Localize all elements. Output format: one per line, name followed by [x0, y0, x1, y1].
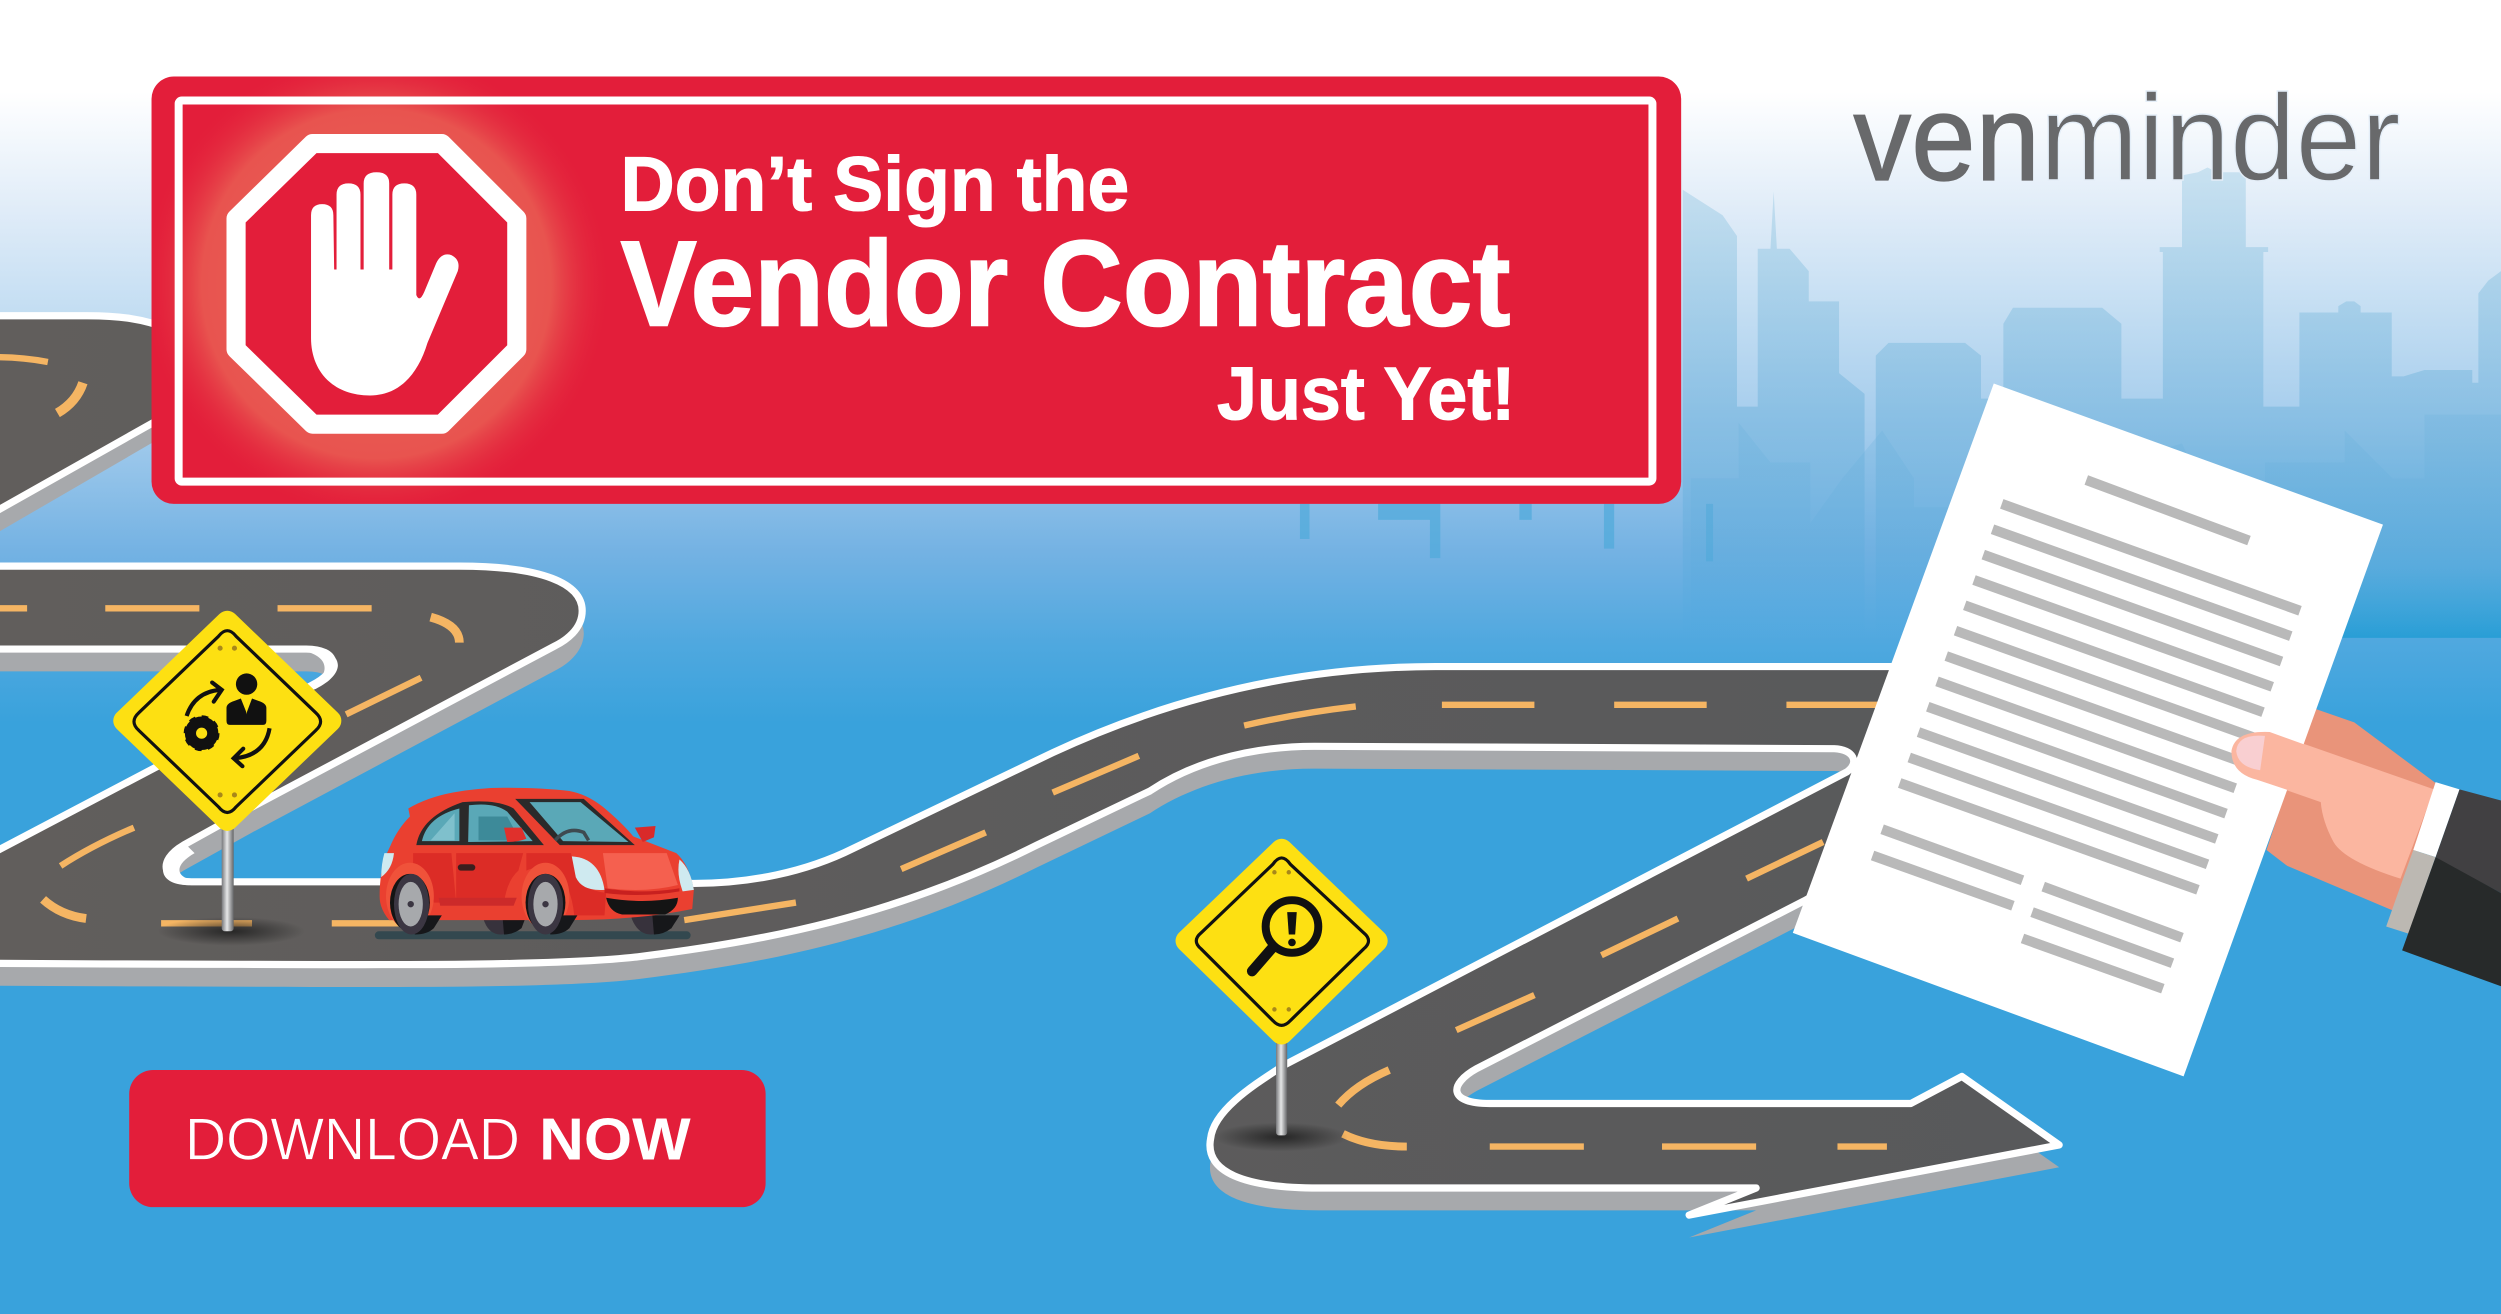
- logo: venminder: minder: [2040, 70, 2401, 207]
- car steering wheel: [555, 830, 589, 840]
- road side wall: [0, 588, 2059, 1237]
- car headlights: [572, 856, 605, 890]
- sign panel: [1187, 850, 1377, 1033]
- document text lines: [1873, 480, 2300, 989]
- lane dashes: upper left: [0, 357, 83, 413]
- car shadow and far wheels: [375, 931, 691, 939]
- sign panel: [124, 622, 330, 820]
- car bumper band: [605, 888, 679, 895]
- logo: venminder: ven: [1853, 70, 2040, 207]
- banner glow: [164, 76, 588, 496]
- banner inner border: [179, 100, 1652, 482]
- contract document: [1793, 384, 2383, 1076]
- heading: Vendor Contract: Vendor Contract: [620, 215, 1510, 351]
- shirt cuff: [2413, 782, 2460, 857]
- car body: [380, 788, 694, 920]
- sign shadow: [1214, 1123, 1348, 1151]
- heading: Just Yet!: Just Yet!: [1217, 351, 1515, 435]
- sign post: [1276, 1040, 1287, 1135]
- road: upper left segment: [0, 316, 167, 536]
- sign shadow: [158, 917, 305, 946]
- download button: NOW: [539, 1106, 691, 1172]
- city skyline: [1300, 167, 2501, 638]
- sign post: [222, 826, 234, 931]
- hairpin white crescents: [163, 646, 338, 885]
- download button: DOWNLOAD: [185, 1106, 520, 1172]
- car hood panel: [603, 853, 678, 890]
- lane dashes: main road: [0, 608, 1887, 1147]
- car door panels: [413, 853, 456, 903]
- icon: person with gear and cycle arrows: [186, 673, 270, 766]
- title banner: [152, 77, 1681, 504]
- road: winding main body with arrow end: [0, 566, 2059, 1237]
- road sign: contract review warning: [1187, 850, 1377, 1151]
- logo: venminder: [1853, 70, 2401, 207]
- car windows: [416, 799, 635, 845]
- red car: [375, 788, 694, 939]
- palm: [2231, 732, 2434, 879]
- hand back: [2267, 708, 2436, 914]
- jacket sleeve: [2436, 789, 2501, 893]
- thumb over document: [2231, 732, 2345, 804]
- hand holding contract: [2231, 708, 2501, 986]
- road surface: [0, 566, 2059, 1215]
- download button: [129, 1070, 766, 1207]
- icon: stop sign with hand: [236, 144, 517, 424]
- car door handle: [458, 864, 475, 871]
- car grille: [606, 898, 678, 915]
- heading: Don't Sign the: Don’t Sign the: [620, 143, 1129, 227]
- road sign: vendor management: [124, 622, 330, 946]
- car wheels: [386, 863, 577, 934]
- thumbnail: [2236, 736, 2265, 770]
- car wing mirrors: [504, 828, 526, 842]
- icon: magnifier with exclamation: [1252, 900, 1318, 971]
